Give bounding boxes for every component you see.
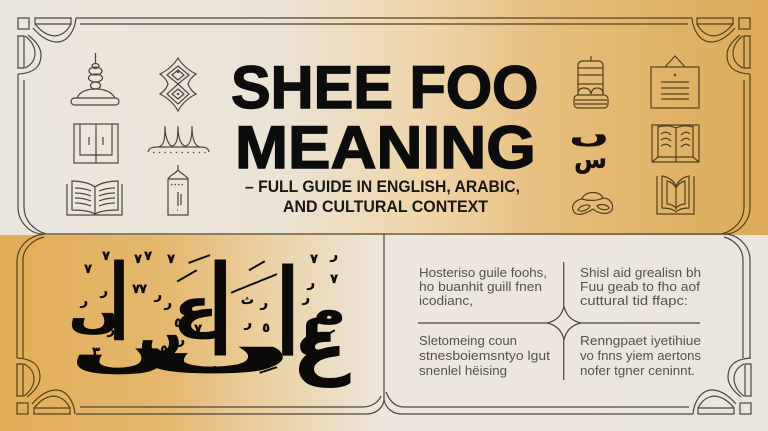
icon: hanging sign — [651, 56, 699, 108]
calligraphy diacritic marks: ـــــ — [184, 245, 212, 268]
calligraphy diacritic marks: ر — [330, 248, 338, 263]
arabic calligraphy: ا — [110, 243, 128, 365]
calligraphy diacritic marks: ٧ — [84, 262, 92, 277]
arabic calligraphy: ں — [139, 313, 182, 360]
text block: bottom right: vo fnns yiem aertons — [580, 349, 701, 363]
bottom left panel frame — [17, 234, 384, 414]
calligraphy diacritic marks: ــــ — [243, 252, 267, 275]
calligraphy diacritic marks: ٥ — [160, 343, 168, 358]
arabic calligraphy: م — [302, 287, 346, 337]
calligraphy diacritic marks: ر — [107, 323, 115, 338]
calligraphy diacritic marks: ـــــ — [171, 261, 199, 286]
background: top band — [0, 0, 768, 235]
icon: arched canopy — [148, 126, 209, 152]
arabic calligraphy: ا — [210, 240, 231, 385]
icon: lantern — [574, 56, 608, 108]
arabic calligraphy: ں — [140, 320, 295, 377]
arabic calligraphy — [69, 240, 350, 388]
calligraphy diacritic marks: ٥ — [262, 321, 270, 336]
calligraphy diacritic marks: ٣ — [92, 345, 100, 360]
text block: top right: Fuu geab to fho aof — [580, 280, 701, 294]
arabic calligraphy: ع — [174, 277, 221, 338]
text block: top left — [419, 266, 547, 308]
calligraphy diacritic marks: ٧ — [194, 322, 202, 337]
bottom right panel frame — [384, 234, 751, 414]
background: bottom band — [0, 235, 768, 431]
text block: bottom right: Renngpaet iyetihiue — [580, 334, 701, 348]
text block: bottom right — [580, 334, 701, 378]
icon: geometric diamond — [160, 58, 196, 111]
calligraphy diacritic marks: ٧ — [167, 252, 175, 267]
icon: knot — [573, 192, 613, 214]
icon: arabic strokes: ں — [569, 122, 609, 149]
calligraphy diacritic marks: ٧ — [330, 272, 338, 287]
text block: bottom left: stnesboiemsntyo lgut — [419, 349, 551, 363]
calligraphy diacritic marks: ــــ — [313, 321, 337, 344]
arabic calligraphy: ا — [277, 245, 298, 384]
arabic calligraphy: ع — [292, 303, 350, 388]
calligraphy diacritic marks: ر — [100, 284, 108, 299]
calligraphy diacritic marks: ر — [244, 316, 252, 331]
text block: top right: cuttural tid ffapc: — [580, 294, 688, 308]
text block: top left: Hosteriso guile foohs, — [419, 266, 547, 280]
calligraphy diacritic marks: ر — [154, 288, 162, 303]
top frame — [18, 18, 750, 234]
calligraphy diacritic marks: ر — [80, 294, 88, 309]
calligraphy diacritic marks: ث — [241, 293, 254, 308]
text block: top right: Shisl aid grealisn bh — [580, 266, 701, 280]
subtitle: AND CULTURAL CONTEXT — [283, 198, 488, 216]
icon: arabic strokes: س — [574, 144, 607, 174]
icon: cabinet — [74, 124, 118, 163]
calligraphy diacritic marks: ٧ — [134, 252, 142, 267]
calligraphy diacritic marks — [80, 245, 338, 378]
text block: top right — [580, 266, 701, 308]
arabic calligraphy: ں — [70, 322, 172, 378]
icon: open book — [67, 181, 122, 215]
icon: tower — [168, 165, 188, 215]
calligraphy diacritic marks: ٧ — [132, 282, 140, 297]
calligraphy diacritic marks: ـــــــــــ — [227, 265, 279, 297]
calligraphy diacritic marks: ر — [177, 333, 185, 348]
dividers with star ornament — [418, 262, 700, 380]
title: MEANING — [235, 115, 536, 182]
subtitle — [245, 178, 520, 216]
text block: top left: ho buanhit guill fnen — [419, 280, 542, 294]
calligraphy diacritic marks: ر — [164, 296, 172, 311]
text block: bottom left: Sletomeing coun — [419, 334, 517, 348]
calligraphy diacritic marks: ر — [209, 359, 217, 374]
calligraphy diacritic marks: ٥ — [174, 316, 182, 331]
icon: open book with chevrons — [652, 125, 699, 162]
title — [231, 54, 538, 182]
arabic calligraphy: ں — [69, 292, 120, 338]
calligraphy diacritic marks: ٧ — [139, 282, 147, 297]
calligraphy diacritic marks: ٧ — [144, 249, 152, 264]
calligraphy diacritic marks: ٧ — [102, 249, 110, 264]
title: SHEE FOO — [231, 54, 538, 121]
text block: bottom left — [419, 334, 551, 378]
calligraphy diacritic marks: ر — [114, 324, 122, 339]
text block: bottom right: nofer tgner ceninnt. — [580, 364, 695, 378]
icon: hanging lamp — [71, 53, 119, 105]
text block: bottom left: snenlel hëising — [419, 364, 507, 378]
icon: nested book — [657, 176, 694, 214]
icon: arabic strokes — [569, 122, 609, 174]
calligraphy diacritic marks: ر — [307, 276, 315, 291]
calligraphy diacritic marks: ٧ — [310, 252, 318, 267]
subtitle: – FULL GUIDE IN ENGLISH, ARABIC, — [245, 178, 520, 196]
calligraphy diacritic marks: ر — [302, 291, 310, 306]
text block: top left: icodianc, — [419, 294, 473, 308]
calligraphy diacritic marks: ــــ — [256, 357, 279, 378]
calligraphy diacritic marks: ر — [260, 296, 268, 311]
